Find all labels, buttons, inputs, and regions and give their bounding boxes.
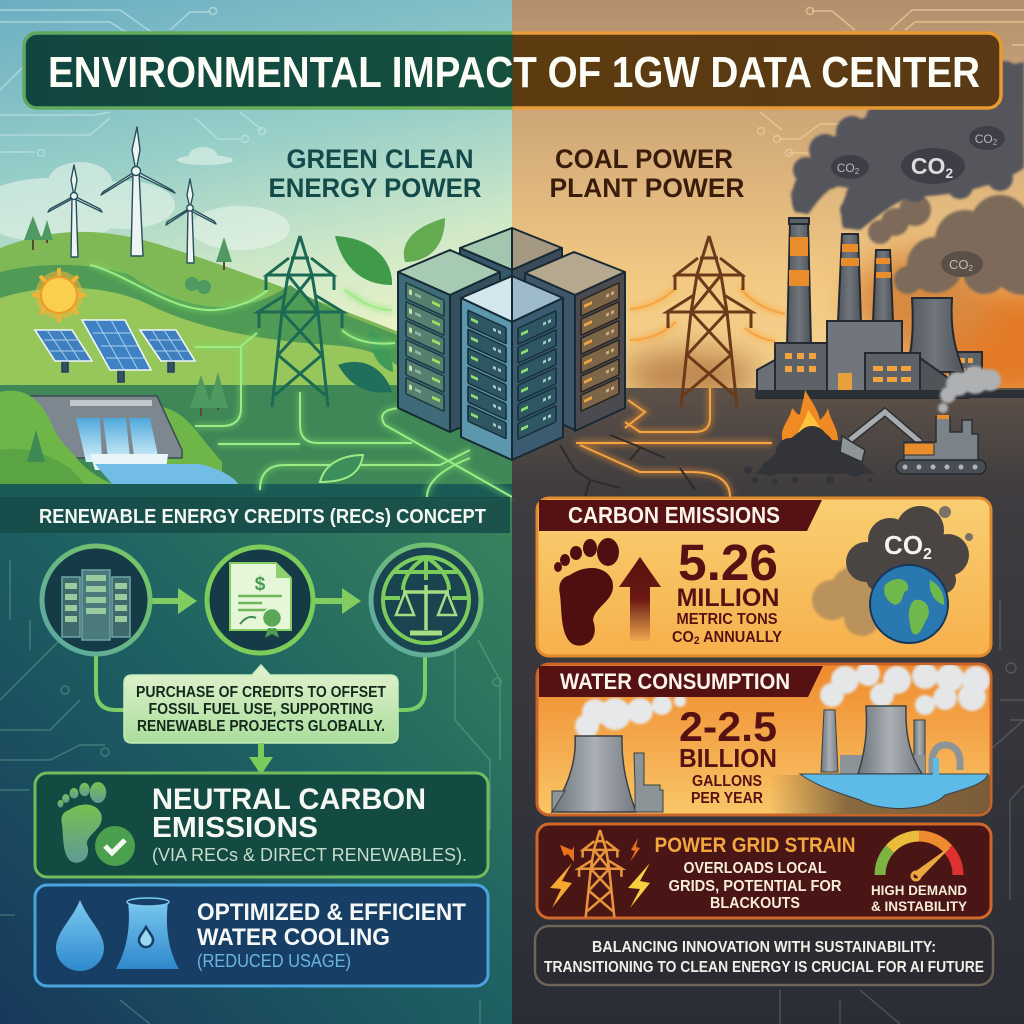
gauge label bbox=[871, 882, 968, 914]
water heading: WATER CONSUMPTION bbox=[560, 669, 790, 694]
callout: credits explanation: PURCHASE OF CREDITS TO OFFSET bbox=[136, 684, 386, 701]
smoke: coal plumes bbox=[791, 61, 1024, 295]
coal plant bbox=[755, 218, 1024, 398]
pylon: coal grid bbox=[667, 236, 752, 407]
callout: credits explanation: RENEWABLE PROJECTS GLOBALLY. bbox=[137, 718, 385, 735]
ground cracks bbox=[560, 435, 695, 497]
icon: certificate circle bbox=[207, 547, 313, 653]
left steam bbox=[575, 695, 686, 738]
water cooling text bbox=[197, 899, 466, 971]
footer callout: TRANSITIONING TO CLEAN ENERGY IS CRUCIAL FOR AI FUTURE bbox=[544, 959, 984, 976]
gauge label: & INSTABILITY bbox=[871, 898, 968, 914]
clouds: pale background clouds bbox=[0, 147, 290, 250]
carbon figure: ANNUALLY bbox=[700, 629, 783, 646]
water figure bbox=[679, 703, 777, 807]
panel: power grid strain bbox=[537, 824, 991, 918]
panel: neutral carbon emissions bbox=[35, 773, 488, 877]
circuit traces: top decoration bbox=[0, 8, 1024, 156]
carbon heading bbox=[539, 500, 822, 531]
CO2 smoke labels: 2 bbox=[855, 167, 860, 176]
arrow: callout to neutral panel bbox=[249, 743, 273, 775]
callout: credits explanation: FOSSIL FUEL USE, SUPPORTING bbox=[148, 701, 374, 718]
background: coal lower panel bbox=[512, 490, 1024, 1024]
grid strain text bbox=[654, 834, 856, 912]
carbon figure bbox=[672, 534, 783, 647]
solar panels bbox=[35, 320, 195, 382]
title banner bbox=[24, 33, 1001, 108]
hydro dam bbox=[0, 391, 238, 484]
footer callout: BALANCING INNOVATION WITH SUSTAINABILITY: bbox=[592, 939, 936, 956]
left plant buildings bbox=[552, 753, 663, 812]
carbon figure: CO bbox=[672, 629, 695, 646]
neutral carbon text: (VIA RECs & DIRECT RENEWABLES). bbox=[152, 844, 467, 865]
water cooling text: WATER COOLING bbox=[197, 924, 390, 951]
CO2 smoke labels: CO bbox=[837, 161, 855, 175]
CO2 smoke labels: 2 bbox=[969, 264, 974, 273]
background: clean energy sky bbox=[0, 0, 512, 400]
sun bbox=[32, 268, 86, 322]
grid strain text: OVERLOADS LOCAL bbox=[684, 860, 827, 877]
water figure: PER YEAR bbox=[691, 790, 763, 807]
CO2 smoke labels bbox=[831, 126, 1005, 277]
CO2 smoke labels: CO bbox=[911, 153, 945, 179]
icon: globe and balance circle bbox=[371, 545, 481, 655]
heading: coal power: COAL POWER bbox=[555, 144, 733, 174]
icon: ground leaf bbox=[320, 455, 363, 482]
coal pile and fire bbox=[744, 390, 875, 485]
icon: check badge bbox=[95, 826, 135, 866]
arrow: server to credits bbox=[150, 588, 197, 614]
panel: RECs concept bbox=[0, 497, 510, 775]
icon: water drop bbox=[56, 900, 104, 971]
icons: lightning bolts bbox=[550, 838, 650, 908]
heading: coal power: PLANT POWER bbox=[550, 173, 744, 203]
grid strain text: GRIDS, POTENTIAL FOR bbox=[668, 878, 842, 895]
water figure: BILLION bbox=[679, 743, 777, 773]
icon: CO2 cloud and earth bbox=[812, 506, 973, 643]
icon: up arrow bbox=[619, 557, 661, 641]
arrow: credits to balance bbox=[314, 588, 361, 614]
water figure: GALLONS bbox=[692, 773, 762, 790]
CO2 smoke labels: 2 bbox=[945, 165, 953, 181]
connectors to callout bbox=[96, 650, 425, 710]
carbon figure: METRIC TONS bbox=[676, 611, 778, 628]
background: coal sky bbox=[512, 0, 1024, 400]
grid strain text: BLACKOUTS bbox=[710, 895, 800, 912]
heading: green clean energy bbox=[268, 144, 482, 203]
heading: coal power bbox=[550, 144, 744, 203]
left cooling tower bbox=[552, 736, 636, 812]
hills: green landscape bbox=[0, 232, 512, 498]
gauge label: HIGH DEMAND bbox=[871, 882, 967, 898]
right plant with reservoir bbox=[770, 662, 990, 815]
background: clean energy lower panel bbox=[0, 490, 512, 1024]
excavator bbox=[840, 366, 1001, 474]
power lines: green glow bbox=[90, 265, 512, 497]
icon: strained pylon bbox=[579, 830, 622, 917]
icon: cooling tower bbox=[116, 898, 179, 969]
background: coal horizon glow bbox=[620, 250, 1024, 405]
rack: left bbox=[398, 250, 500, 432]
RECs heading bbox=[0, 497, 510, 533]
CO2 smoke labels: CO bbox=[949, 257, 969, 272]
panel: water consumption bbox=[537, 662, 991, 815]
coal ground bbox=[512, 388, 1024, 498]
neutral carbon text bbox=[152, 783, 467, 865]
icon: demand gauge bbox=[880, 836, 958, 880]
neutral carbon text: EMISSIONS bbox=[152, 812, 318, 844]
circuit traces: lower decoration bbox=[0, 560, 1024, 1024]
pylon: clean grid bbox=[258, 236, 343, 407]
icon: footprint bbox=[554, 538, 619, 646]
carbon figure: MILLION bbox=[677, 584, 779, 612]
icon: CO2 cloud and earth: CO bbox=[884, 530, 923, 560]
water cooling text: (REDUCED USAGE) bbox=[197, 951, 351, 971]
icon: server circle bbox=[42, 546, 150, 654]
carbon heading: CARBON EMISSIONS bbox=[568, 502, 780, 528]
trees bbox=[24, 216, 232, 416]
rack: right bbox=[525, 252, 625, 431]
carbon figure: 2 bbox=[694, 635, 700, 647]
heading: green clean energy: GREEN CLEAN bbox=[286, 144, 474, 174]
rack: front bbox=[461, 276, 563, 460]
neutral carbon text: NEUTRAL CARBON bbox=[152, 783, 426, 816]
footer callout bbox=[535, 926, 993, 985]
icon: CO2 cloud and earth: 2 bbox=[923, 546, 932, 563]
CO2 smoke labels: 2 bbox=[993, 138, 998, 147]
power lines: orange glow bbox=[576, 288, 785, 497]
panel: water cooling bbox=[35, 885, 488, 986]
heading: green clean energy: ENERGY POWER bbox=[268, 173, 482, 203]
panel: carbon emissions bbox=[537, 498, 991, 656]
callout: credits explanation bbox=[124, 665, 398, 743]
carbon figure: 5.26 bbox=[678, 534, 778, 591]
CO2 smoke labels: CO bbox=[975, 132, 993, 146]
leaves: clean energy accents bbox=[335, 218, 445, 393]
wind turbines bbox=[48, 127, 216, 263]
data center racks bbox=[398, 228, 625, 460]
water cooling text: OPTIMIZED & EFFICIENT bbox=[197, 899, 466, 926]
icon: green footprint bbox=[58, 782, 106, 863]
RECs heading: RENEWABLE ENERGY CREDITS (RECs) CONCEPT bbox=[39, 505, 486, 528]
icon: certificate circle: $ bbox=[255, 574, 266, 595]
water figure: 2-2.5 bbox=[679, 703, 777, 750]
rack: back bbox=[460, 228, 562, 300]
grid strain text: POWER GRID STRAIN bbox=[654, 834, 856, 857]
